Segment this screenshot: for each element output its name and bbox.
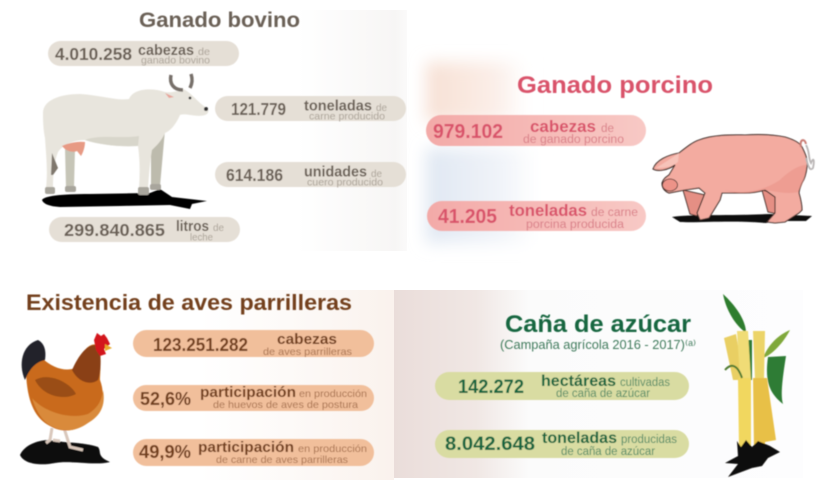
stat: cabezas de aves parrilleras: de aves parrilleras [263, 346, 352, 358]
stat: cabezas de ganado bovino: ganado bovino [141, 54, 210, 66]
stat: hectáreas cultivadas: 142.272 [458, 377, 524, 398]
title: existencia de aves parrilleras: Existencia de aves parrilleras [26, 290, 352, 315]
stat: litros de leche [49, 217, 240, 244]
title: ganado bovino: Ganado bovino [139, 9, 300, 32]
stat: cabezas de ganado bovino: 4.010.258 [55, 44, 132, 64]
stat: hectáreas cultivadas: hectáreas [541, 373, 616, 390]
stat: toneladas producidas: toneladas [542, 430, 617, 447]
stat: participación en carne: de carne de aves parrilleras [216, 454, 348, 466]
stat: cabezas de ganado porcino: de ganado porcino [523, 134, 624, 146]
stat: unidades de cuero producido: de [371, 168, 382, 180]
stat: participación en huevos: participación [200, 385, 296, 401]
panel: ganado bovino [15, 9, 407, 251]
stat: cabezas de ganado porcino: cabezas [530, 118, 596, 136]
stat: toneladas de carne producido: de [376, 102, 387, 114]
stat: toneladas de carne producido: toneladas [304, 98, 372, 114]
stat: unidades de cuero producido: 614.186 [226, 165, 283, 185]
stat: participación en huevos: 52,6% [140, 389, 191, 409]
icon: cow [42, 74, 208, 209]
stat: cabezas de ganado porcino: de [601, 123, 614, 135]
stat: hectáreas cultivadas: de caña de azúcar [556, 388, 650, 400]
stat: cabezas de aves parrilleras [133, 330, 374, 358]
stat: participación en carne: participación [198, 440, 294, 456]
stat: litros de leche: 299.840.865 [64, 220, 165, 240]
stat: cabezas de ganado porcino [426, 115, 646, 146]
stat: toneladas de carne porcina producida: de carne [591, 207, 638, 219]
stat: unidades de cuero producido: cuero producido [307, 176, 383, 188]
title: ganado porcino: Ganado porcino [517, 72, 713, 99]
subtitle: campaña agrícola: (Campaña agrícola 2016 - 2017)⁽ᵃ⁾ [500, 338, 696, 352]
stat: litros de leche: leche [190, 232, 213, 244]
stat: hectáreas cultivadas: cultivadas [620, 377, 670, 389]
stat: participación en carne [133, 439, 374, 466]
stat: cabezas de ganado bovino [48, 41, 239, 66]
stat: participación en huevos [133, 385, 374, 411]
stat: cabezas de ganado bovino: cabezas [138, 43, 194, 59]
stat: toneladas de carne producido: 121.779 [231, 99, 286, 119]
stat: cabezas de ganado porcino: 979.102 [433, 121, 503, 143]
stat: cabezas de ganado bovino: de [198, 46, 210, 58]
stat: unidades de cuero producido [215, 162, 406, 188]
title: caña de azúcar: Caña de azúcar [505, 311, 691, 338]
stat: toneladas producidas: producidas [621, 434, 677, 446]
stat: litros de leche: litros [176, 219, 209, 235]
stat: toneladas de carne porcina producida: porcina producida [526, 219, 625, 231]
stat: toneladas de carne producido: carne producido [309, 110, 385, 122]
stat: participación en carne: 49,9% [139, 442, 191, 462]
stat: cabezas de aves parrilleras: 123.251.282 [153, 335, 248, 355]
panel: ganado porcino [426, 62, 814, 243]
stat: toneladas producidas: de caña de azúcar [561, 446, 655, 458]
stat: toneladas producidas: 8.042.648 [445, 434, 535, 455]
icon: sugar cane [723, 294, 790, 477]
stat: unidades de cuero producido: unidades [304, 164, 367, 180]
stat: toneladas de carne producido [215, 96, 406, 122]
stat: toneladas de carne porcina producida: toneladas [509, 202, 587, 220]
stat: toneladas de carne porcina producida [427, 201, 646, 231]
panel: existencia de aves parrilleras [20, 290, 394, 480]
stat: cabezas de aves parrilleras: cabezas [277, 332, 337, 348]
stat: participación en carne: en producción [298, 443, 367, 455]
stat: toneladas de carne porcina producida: 41.205 [438, 206, 497, 228]
panel: caña de azúcar [394, 290, 803, 478]
icon: pig [653, 135, 814, 223]
stat: litros de leche: de [213, 222, 224, 234]
stat: hectáreas cultivadas [435, 372, 689, 400]
icon: hen [20, 333, 112, 464]
stat: participación en huevos: en producción [299, 388, 367, 400]
stat: toneladas producidas [435, 430, 689, 458]
stat: participación en huevos: de huevos de aves de postura [213, 399, 358, 411]
